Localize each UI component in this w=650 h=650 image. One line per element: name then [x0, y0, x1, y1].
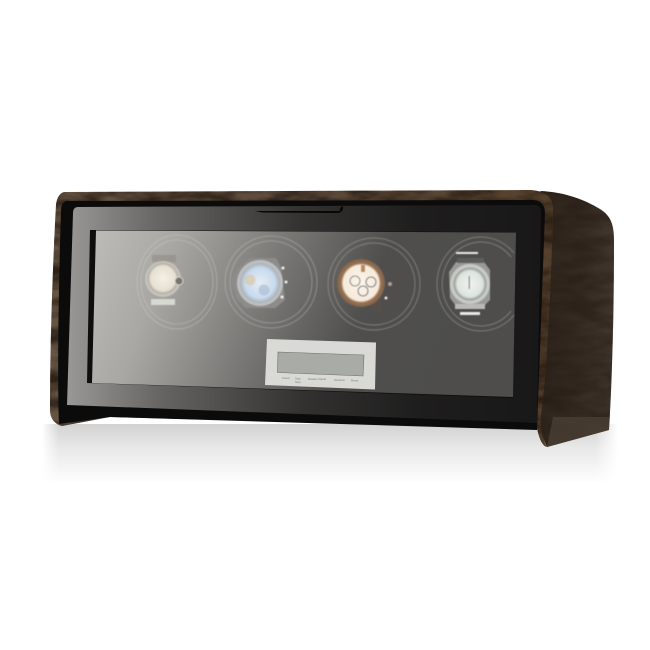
- control labels: Power: [282, 376, 290, 380]
- control panel: [265, 339, 376, 390]
- glossy bezel: [67, 205, 541, 423]
- watch 4: [449, 252, 490, 315]
- control labels: [282, 376, 359, 384]
- control labels: Stop: [295, 380, 301, 384]
- side lower lip: [547, 417, 609, 447]
- black inner frame: [58, 200, 545, 430]
- winder ring 3: [328, 238, 420, 330]
- case right side panel: [538, 191, 614, 447]
- watch 2: [231, 258, 288, 308]
- winder ring 2: [225, 236, 317, 328]
- control labels: Reset: [351, 378, 359, 382]
- lcd screen: [278, 352, 364, 376]
- handle slot: [255, 206, 343, 213]
- control labels: Rotation Mode: [308, 377, 327, 381]
- winder ring 1: [137, 235, 217, 329]
- glass window: [92, 230, 516, 397]
- watch 3: [337, 259, 392, 311]
- case front wood frame: [50, 190, 553, 447]
- watch 1: [145, 255, 183, 305]
- window shadow edge: [87, 230, 516, 398]
- control labels: Direction: [334, 378, 345, 382]
- floor reflection: [42, 424, 618, 484]
- winder ring 4: [437, 237, 514, 331]
- control labels: Start: [295, 376, 301, 380]
